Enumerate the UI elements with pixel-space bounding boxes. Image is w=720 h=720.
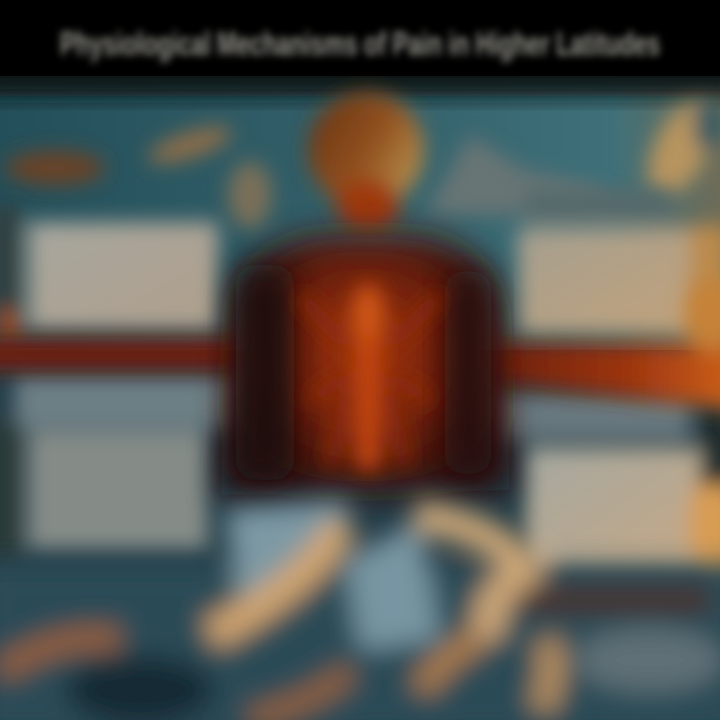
panel: upper left	[0, 205, 218, 340]
figure: torso with glowing spine	[220, 235, 510, 495]
figure: head	[308, 92, 424, 231]
clouds: background clouds and mountains	[5, 94, 720, 229]
panel: lower left	[0, 375, 240, 560]
title band	[0, 0, 720, 76]
spine	[300, 285, 440, 470]
bed sheets: lower drapery	[0, 500, 720, 720]
panel: upper right	[518, 190, 720, 335]
arms: horizontal red band	[0, 279, 720, 410]
panel: lower right	[485, 392, 720, 585]
